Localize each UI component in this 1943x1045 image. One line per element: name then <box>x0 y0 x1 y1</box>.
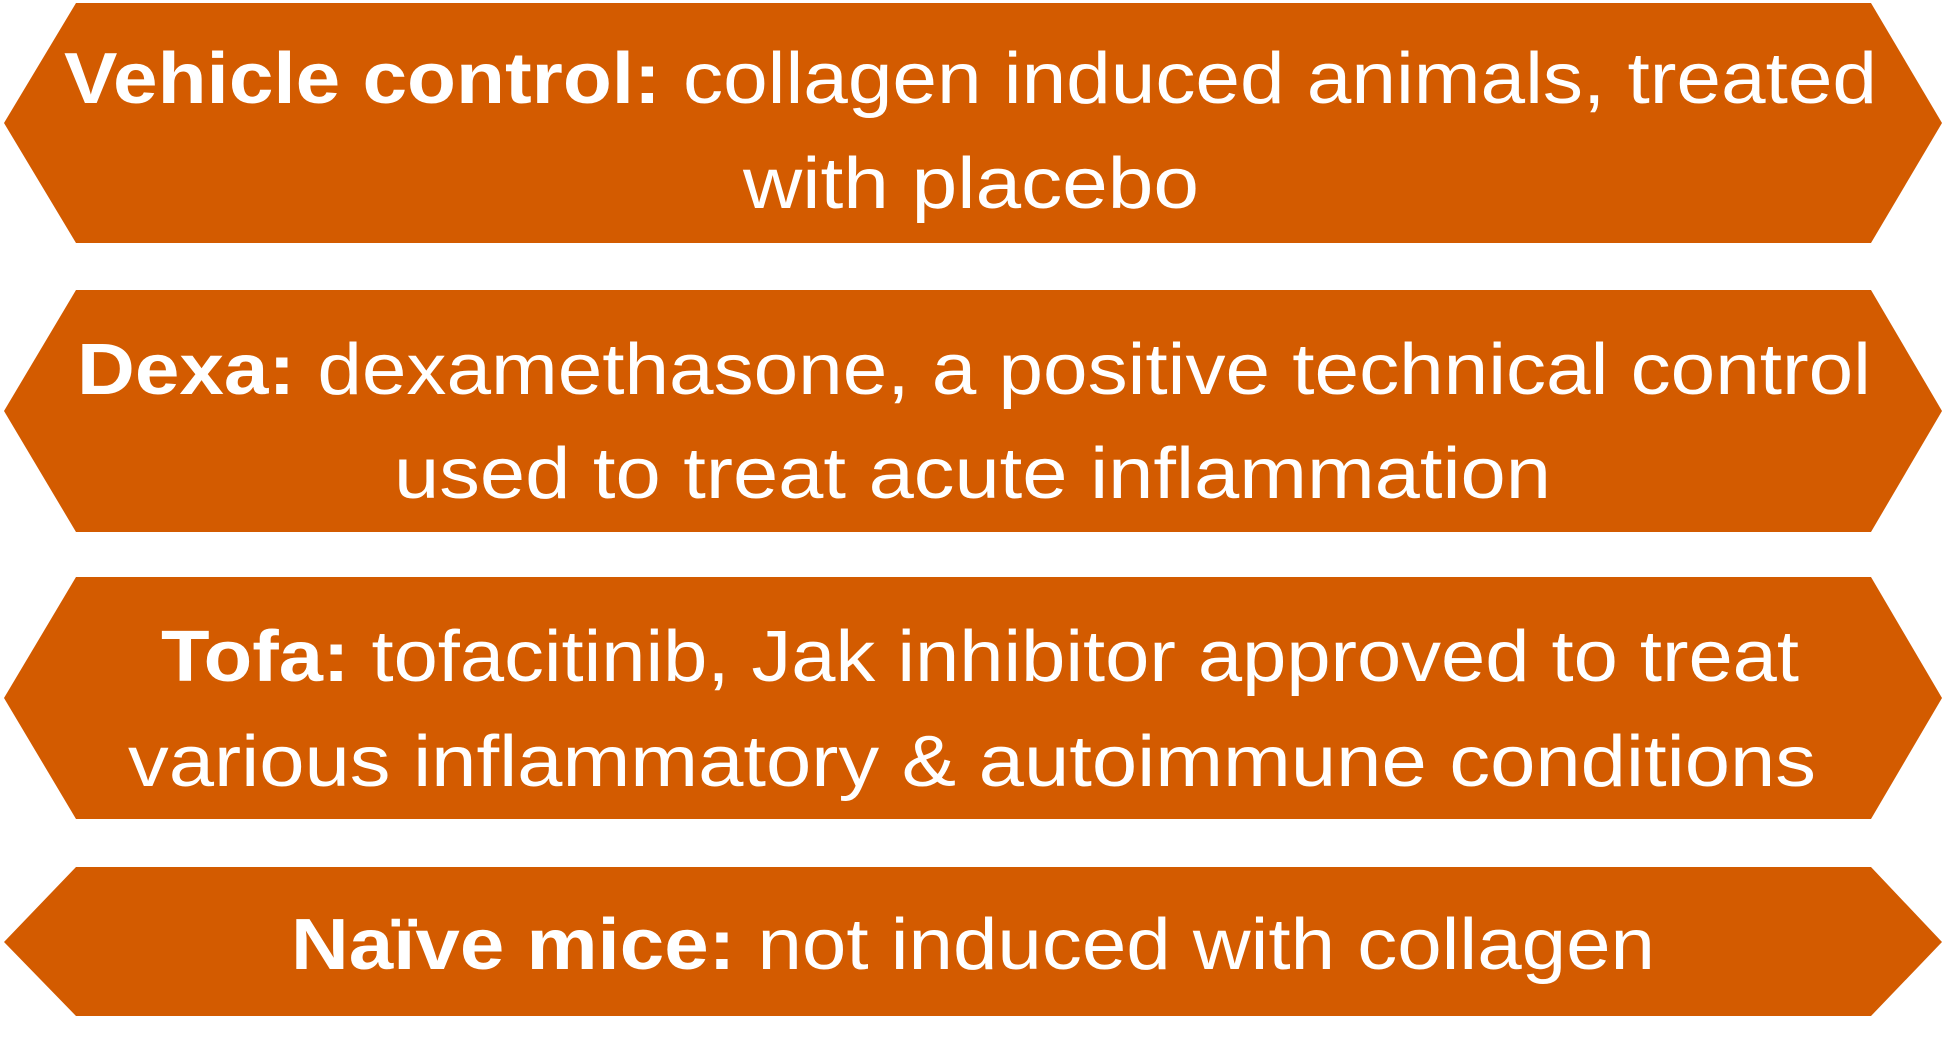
text: tofa: various inflammatory & autoimmune conditions <box>128 722 1816 802</box>
text: dexa <box>77 330 1871 514</box>
text: dexa: used to treat acute inflammation <box>394 434 1551 514</box>
text: vehicle control <box>64 39 1877 224</box>
text: naive mice: Naïve mice: not induced with collagen <box>291 905 1655 985</box>
text: dexa: Dexa: dexamethasone, a positive technical control <box>77 330 1871 410</box>
banner: tofa <box>4 577 1942 819</box>
text: tofa: Tofa: tofacitinib, Jak inhibitor approved to treat <box>161 617 1799 697</box>
text: vehicle control: with placebo <box>742 144 1199 224</box>
text: tofa <box>128 617 1816 802</box>
text: vehicle control: Vehicle control: collagen induced animals, treated <box>64 39 1877 119</box>
banner: vehicle control <box>4 3 1942 243</box>
banner: dexa <box>4 290 1942 532</box>
banner: naive mice <box>4 867 1942 1016</box>
